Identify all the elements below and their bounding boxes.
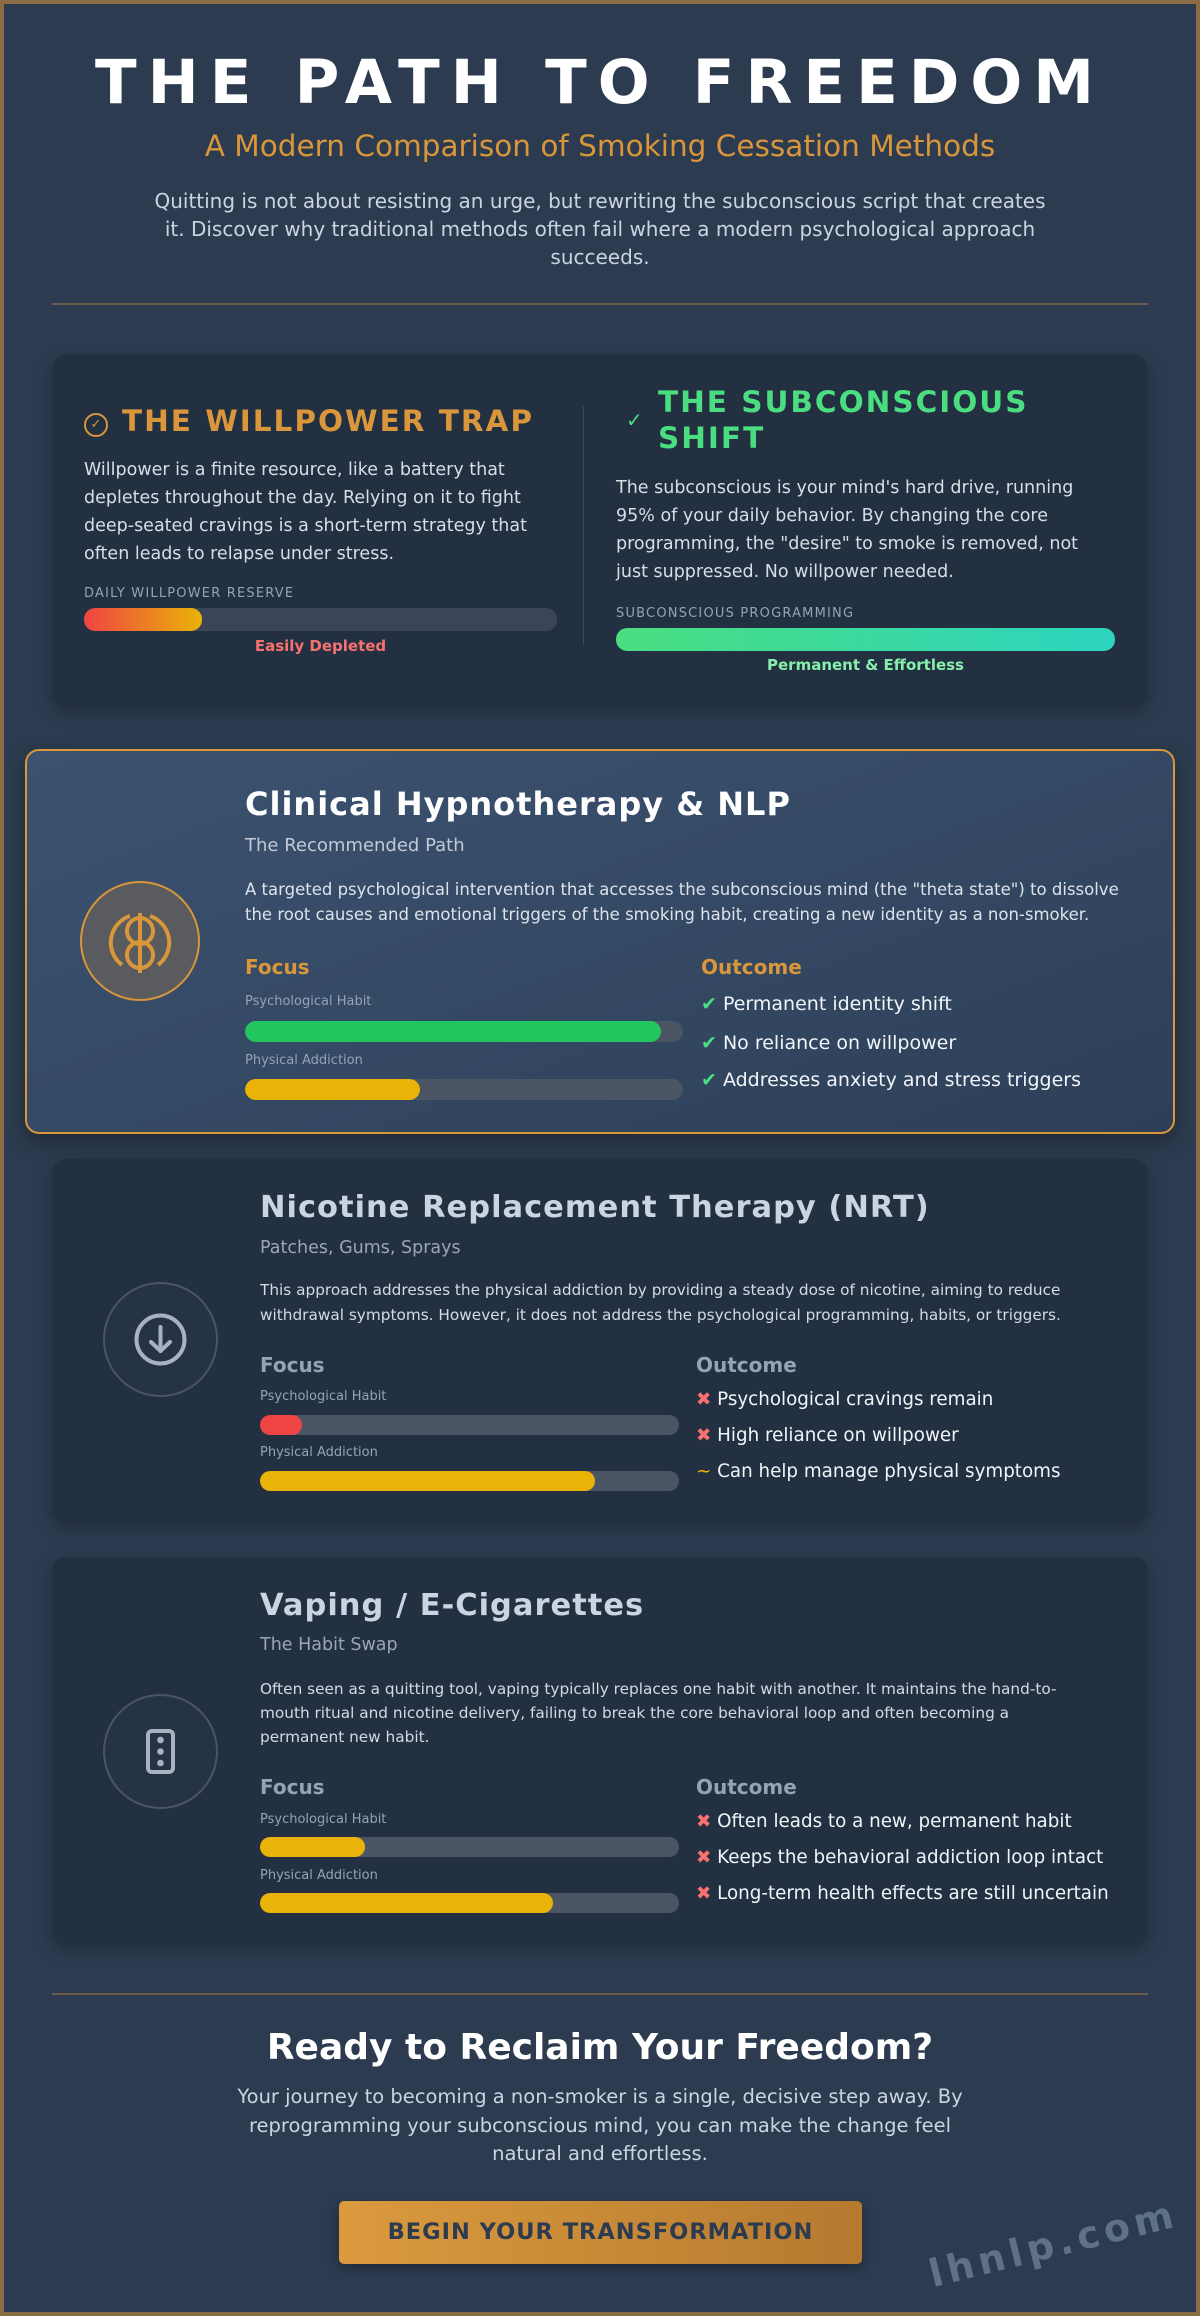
description: Often seen as a quitting tool, vaping typically replaces one habit with another. It maintains the hand-to-mouth ritual and nicotine delivery, failing to break the core behavioral loop and often becoming a permanent new habit. — [260, 1680, 1057, 1746]
watermark: lhnlp.com — [924, 2192, 1182, 2296]
card: NRT: ~ Can help manage physical symptoms — [696, 1461, 1060, 1482]
bar: physical — [245, 1079, 683, 1100]
bar: physical — [260, 1471, 679, 1491]
bar: psychological — [245, 1021, 683, 1042]
outcome heading: Outcome — [701, 955, 802, 979]
heading: willpower trap: THE WILLPOWER TRAP — [122, 404, 534, 438]
subtitle: The Habit Swap — [260, 1635, 398, 1655]
title: Nicotine Replacement Therapy (NRT) — [260, 1190, 930, 1225]
title: Clinical Hypnotherapy & NLP — [245, 785, 791, 823]
card: clinical hypnotherapy: Physical Addiction — [245, 1053, 363, 1068]
icon: arrow down — [103, 1282, 218, 1397]
caption: easily depleted: Easily Depleted — [255, 637, 386, 655]
card: vaping — [52, 1557, 1148, 1943]
card: NRT: Psychological Habit — [260, 1389, 386, 1404]
card: clinical hypnotherapy: Psychological Habit — [245, 994, 371, 1009]
bar: subconscious — [616, 628, 1115, 651]
bar: willpower — [84, 608, 557, 631]
title: THE PATH TO FREEDOM — [95, 47, 1105, 118]
description: A targeted psychological intervention that accesses the subconscious mind (the "theta state") to dissolve the root causes and emotional triggers of the smoking habit, creating a new identity as a non-smoker. — [245, 880, 1119, 924]
subtitle: The Recommended Path — [245, 835, 465, 856]
focus heading: Focus — [260, 1775, 325, 1799]
outcome heading: Outcome — [696, 1353, 797, 1377]
icon: vape device — [103, 1694, 218, 1809]
outcome list: ✔ Permanent identity shift — [701, 993, 952, 1015]
panel: willpower vs subconscious: ✓ — [626, 408, 645, 432]
text: subconscious: The subconscious is your mind's hard drive, running 95% of your daily behavior. By changing the core programming, the "desire" to smoke is removed, not just suppressed. No willpower needed. — [616, 478, 1078, 582]
card: NRT: Physical Addiction — [260, 1445, 378, 1460]
card: vaping: ✖ Keeps the behavioral addiction loop intact — [696, 1847, 1103, 1868]
panel: willpower vs subconscious — [52, 354, 1148, 706]
outcome list: ✖ Often leads to a new, permanent habit — [696, 1811, 1072, 1832]
description: This approach addresses the physical addiction by providing a steady dose of nicotine, aiming to reduce withdrawal symptoms. However, it does not address the psychological programming, habits, or triggers. — [260, 1281, 1061, 1324]
heading: subconscious shift: THE SUBCONSCIOUS SHIFT — [658, 385, 1028, 455]
CTA text: Your journey to becoming a non-smoker is a single, decisive step away. By reprogramming your subconscious mind, you can make the change feel natural and effortless. — [237, 2085, 963, 2165]
card: vaping: ✖ Long-term health effects are still uncertain — [696, 1883, 1109, 1904]
bar: physical — [260, 1893, 679, 1913]
card: clinical hypnotherapy — [25, 749, 1175, 1134]
heading: willpower trap: ✓ — [91, 417, 101, 432]
subtitle: Patches, Gums, Sprays — [260, 1238, 461, 1258]
label: daily willpower reserve: DAILY WILLPOWER RESERVE — [84, 586, 294, 601]
button — [339, 2201, 862, 2264]
card: NRT: ✖ High reliance on willpower — [696, 1425, 959, 1446]
CTA heading: Ready to Reclaim Your Freedom? — [267, 2027, 933, 2068]
intro text: Quitting is not about resisting an urge, but rewriting the subconscious script that creates it. Discover why traditional methods often fail where a modern psychological approach succeeds. — [154, 189, 1046, 269]
subtitle: A Modern Comparison of Smoking Cessation Methods — [205, 129, 995, 163]
card: NRT — [52, 1159, 1148, 1522]
card: vaping: Psychological Habit — [260, 1812, 386, 1827]
card: clinical hypnotherapy: ✔ No reliance on willpower — [701, 1032, 956, 1054]
focus heading: Focus — [260, 1353, 325, 1377]
button: BEGIN YOUR TRANSFORMATION — [388, 2219, 813, 2245]
bar: psychological — [260, 1415, 679, 1435]
focus heading: Focus — [245, 955, 310, 979]
icon: infinity — [80, 881, 200, 1001]
caption: permanent: Permanent & Effortless — [767, 656, 964, 674]
outcome heading: Outcome — [696, 1775, 797, 1799]
outcome list: ✖ Psychological cravings remain — [696, 1389, 993, 1410]
card: clinical hypnotherapy: ✔ Addresses anxiety and stress triggers — [701, 1069, 1081, 1091]
bar: psychological — [260, 1837, 679, 1857]
label: subconscious programming: SUBCONSCIOUS PROGRAMMING — [616, 606, 854, 621]
text: willpower: Willpower is a finite resource, like a battery that depletes throughout the day. Relying on it to fight deep-seated cravings is a short-term strategy that often leads to relapse under stress. — [84, 460, 527, 564]
card: vaping: Physical Addiction — [260, 1868, 378, 1883]
title: Vaping / E-Cigarettes — [260, 1588, 644, 1623]
